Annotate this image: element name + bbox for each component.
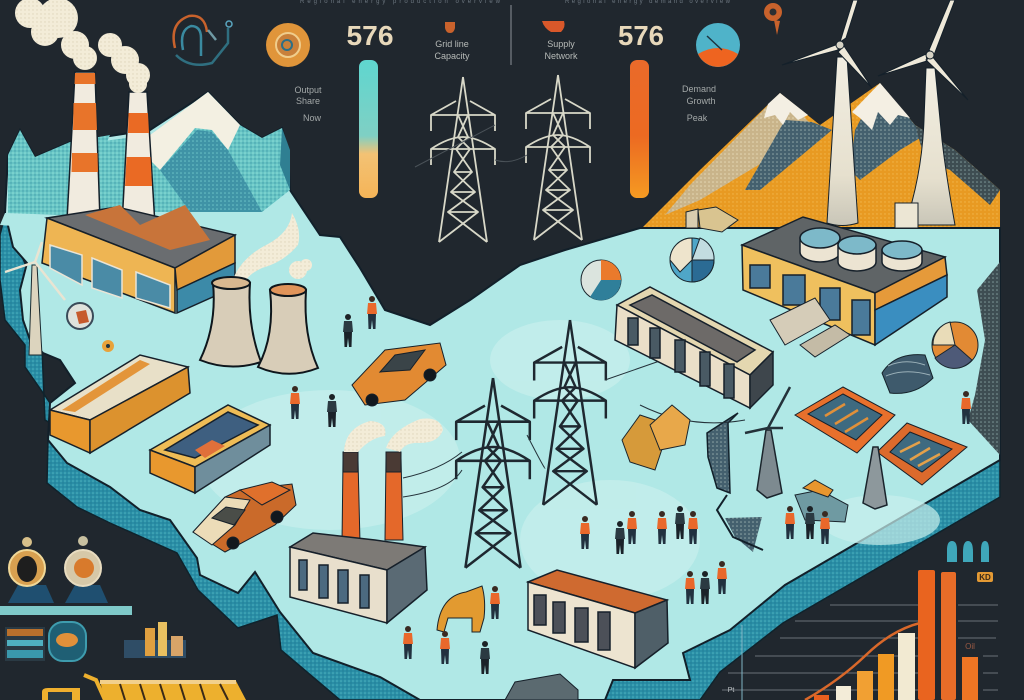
centre left label: Grid line: [435, 39, 469, 49]
pie: centre right large: [670, 238, 714, 282]
chart: bottom right: Oil: [965, 642, 975, 651]
cooling tower: two: [258, 284, 318, 374]
smoke: left chimneys: [15, 0, 150, 93]
divider: [510, 5, 512, 65]
machine: middle right: [622, 405, 690, 470]
pie: far right: [932, 322, 978, 368]
building: bottom centre: [528, 570, 668, 668]
stat: left number: 576: [346, 20, 394, 51]
right labels: Peak: [687, 113, 708, 123]
chart: bottom right: [722, 541, 998, 700]
left labels: Output: [294, 85, 322, 95]
chart: bottom right: KD: [979, 573, 991, 582]
pylon: top left: [431, 77, 495, 242]
warehouse: lower left: [150, 405, 270, 493]
icon: right gauge: [696, 23, 740, 67]
car: orange upper: [352, 343, 446, 406]
factory: centre: [290, 533, 427, 623]
concentric icon: [49, 622, 86, 661]
header text strip: [300, 0, 731, 5]
rock: right: [882, 355, 933, 393]
land crack: dark fissure: [707, 413, 763, 552]
warehouse: upper left: [50, 355, 190, 453]
building: centre right: [615, 287, 773, 408]
right labels: Demand: [682, 84, 716, 94]
centre left label: [434, 22, 470, 61]
wind turbine: small right one: [745, 387, 790, 498]
centre right label: Network: [544, 51, 578, 61]
centre left label: Capacity: [434, 51, 470, 61]
icon: left marker: [102, 340, 114, 352]
small smoke: [289, 259, 312, 279]
left labels: Now: [303, 113, 321, 123]
mini table: [5, 627, 45, 661]
pylon: centre right: [534, 320, 606, 505]
pylon: top right: [526, 75, 590, 240]
wind turbine: big left: [782, 0, 872, 226]
chimney: right tall: [122, 92, 155, 225]
centre right label: Supply: [547, 39, 575, 49]
cooling tower: one: [200, 277, 261, 367]
mountains: teal left: [0, 92, 290, 228]
chimney: centre right: [385, 452, 403, 540]
chimney: left tall: [67, 72, 100, 220]
stat: right number: 576: [618, 20, 664, 51]
factory: left: [42, 205, 235, 313]
right labels: Growth: [686, 96, 716, 106]
smoke: centre chimneys: [344, 418, 443, 452]
mountains: right range: [642, 83, 1000, 228]
chart: bottom right: Pt: [728, 687, 734, 694]
machinery: right: [770, 298, 850, 357]
left labels: Share: [296, 96, 320, 106]
wind turbine: left small: [5, 242, 65, 355]
chimney: centre left: [342, 452, 360, 543]
truck: bottom: [42, 675, 246, 700]
icon: left badge: [67, 303, 93, 329]
vehicle: right: [795, 480, 848, 522]
icon: left dial: [266, 23, 310, 67]
legend bar: [0, 606, 132, 615]
pylon: centre left: [456, 378, 530, 568]
right labels: [682, 84, 716, 123]
panel field: right: [877, 423, 967, 485]
small building by mountain: [686, 203, 918, 232]
power lines: centre: [403, 340, 745, 497]
gauge bar: orange: [630, 60, 649, 198]
icon: top left emblem: [174, 16, 232, 65]
land shading: [200, 320, 940, 600]
wind turbine: big right: [878, 0, 968, 225]
factory: right with tanks: [742, 217, 947, 345]
left labels: [294, 85, 322, 123]
elephant-like machine: [437, 586, 485, 632]
pie: centre right small: [581, 260, 621, 300]
wind turbine: small right two: [863, 447, 887, 509]
smoke: cooling tower plume: [232, 213, 299, 285]
people: [290, 296, 971, 674]
icon: top right badge: [764, 3, 782, 35]
gauge bar: teal: [359, 60, 378, 198]
right wedge shadow: [968, 262, 1000, 455]
medal: right: [65, 536, 108, 603]
power lines: [415, 125, 527, 167]
panel field: left: [795, 387, 895, 453]
mini city: [124, 622, 186, 658]
centre right label: [542, 21, 578, 61]
medal: left: [8, 537, 54, 603]
land side walls: [0, 215, 1000, 700]
car: orange lower: [193, 482, 296, 552]
car: bottom: [505, 674, 578, 700]
